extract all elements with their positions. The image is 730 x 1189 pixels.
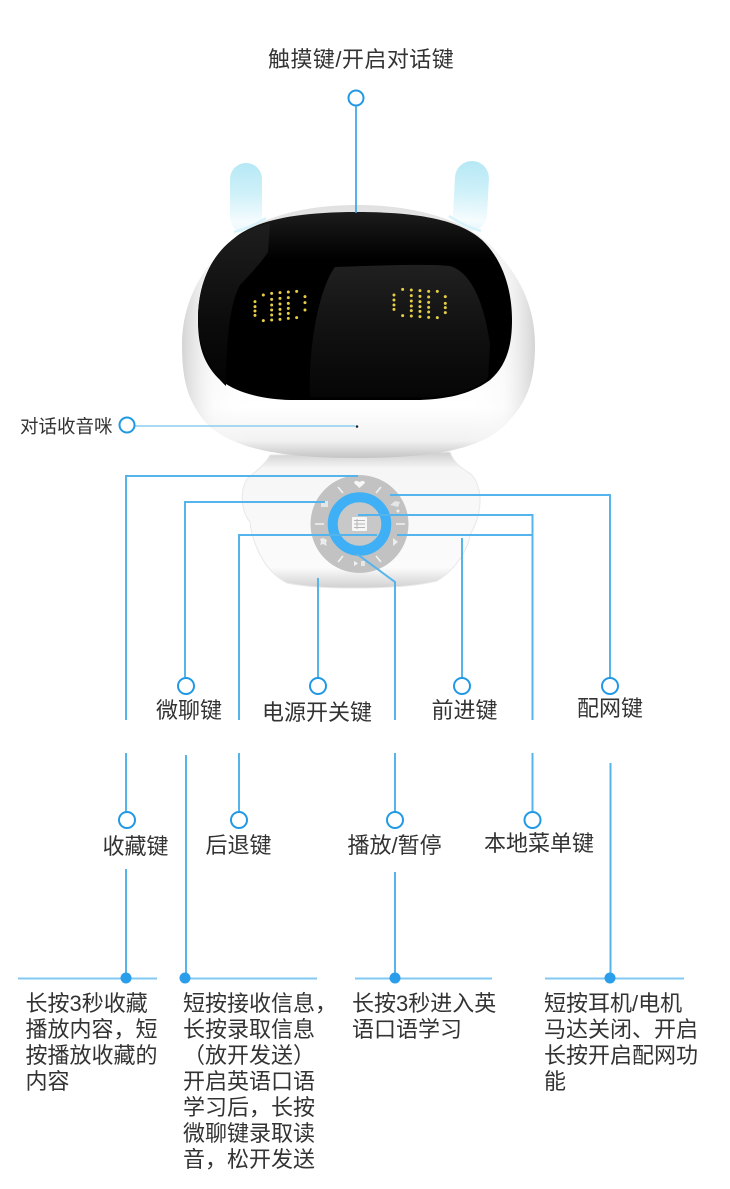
screen reflection <box>310 265 490 397</box>
callout: favourite key <box>18 476 358 1094</box>
callout: chat key: （放开发送） <box>183 1043 315 1068</box>
callout: back key: 后退键 <box>206 833 272 858</box>
robot illustration <box>182 160 535 588</box>
control dial <box>310 475 408 573</box>
callout: chat key: 短按接收信息， <box>183 991 337 1016</box>
left eye LEDs <box>253 290 306 322</box>
callout: network key: 配网键 <box>577 696 643 721</box>
callout: favourite key: 按播放收藏的 <box>26 1043 158 1068</box>
callout: play pause key: 长按3秒进入英 <box>352 991 496 1016</box>
callout: chat key: 音，松开发送 <box>183 1147 315 1172</box>
right antenna <box>452 160 490 232</box>
callout: microphone <box>20 416 358 437</box>
callout: back key <box>206 535 377 858</box>
callout: favourite key: 内容 <box>26 1069 70 1094</box>
head side shading <box>182 205 535 458</box>
robot head <box>182 205 535 458</box>
callout: network key: 长按开启配网功 <box>544 1043 698 1068</box>
callout: chat key: 长按录取信息 <box>183 1017 315 1042</box>
callout: microphone: 对话收音咪 <box>20 416 113 437</box>
callout: chat key: 开启英语口语 <box>183 1069 315 1094</box>
antenna glow <box>234 216 481 232</box>
callout: forward key: 前进键 <box>432 698 498 723</box>
callout: network key: 短按耳机/电机 <box>544 991 682 1016</box>
callout: touch key: 触摸键/开启对话键 <box>268 47 454 72</box>
callout: chat key <box>156 502 337 1172</box>
right eye LEDs <box>392 288 447 319</box>
callout: power key <box>262 578 372 725</box>
callout: forward key <box>397 535 532 723</box>
callout: chat key: 学习后，长按 <box>183 1095 315 1120</box>
callout: local menu key: 本地菜单键 <box>484 831 594 856</box>
callout: network key: 能 <box>544 1069 566 1094</box>
callout: favourite key: 播放内容，短 <box>26 1017 158 1042</box>
callout: touch key <box>268 47 454 213</box>
callout: network key: 马达关闭、开启 <box>544 1017 698 1042</box>
callout: play pause key: 播放/暂停 <box>348 833 442 858</box>
callout: favourite key: 收藏键 <box>102 834 169 859</box>
face screen <box>198 212 512 400</box>
callout: network key <box>390 495 698 1094</box>
robot body <box>242 452 480 588</box>
left screen reflection <box>198 223 270 386</box>
callout: power key: 电源开关键 <box>262 700 372 725</box>
callout: chat key: 微聊键 <box>156 698 222 723</box>
callout: local menu key <box>358 515 594 856</box>
callout: chat key: 微聊键录取读 <box>183 1121 315 1146</box>
callout: play pause key: 语口语学习 <box>352 1017 462 1042</box>
callout: favourite key: 长按3秒收藏 <box>26 991 148 1016</box>
callout: play pause key <box>348 554 496 1042</box>
left antenna <box>230 163 262 233</box>
